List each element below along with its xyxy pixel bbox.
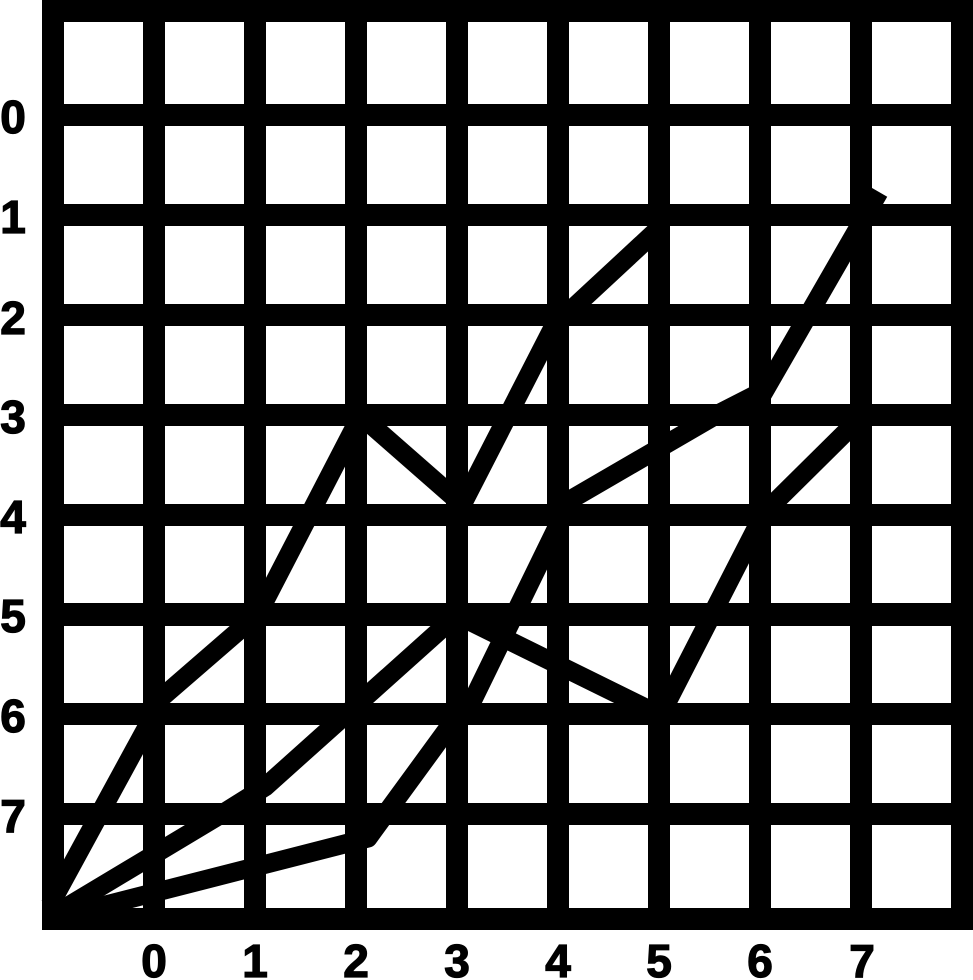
data line 2 [55, 420, 858, 914]
y axis labels: 6 [0, 690, 26, 742]
y axis labels: 0 [0, 91, 26, 143]
data line 1 [50, 232, 655, 905]
y axis labels: 4 [0, 491, 26, 543]
y axis labels: 2 [0, 292, 26, 344]
data line 3 [55, 192, 879, 918]
y axis labels [0, 91, 26, 842]
y axis labels: 3 [0, 391, 26, 443]
y axis labels: 7 [0, 790, 26, 842]
y axis labels: 1 [0, 191, 26, 243]
x axis labels [141, 935, 875, 980]
y axis labels: 5 [0, 590, 26, 642]
